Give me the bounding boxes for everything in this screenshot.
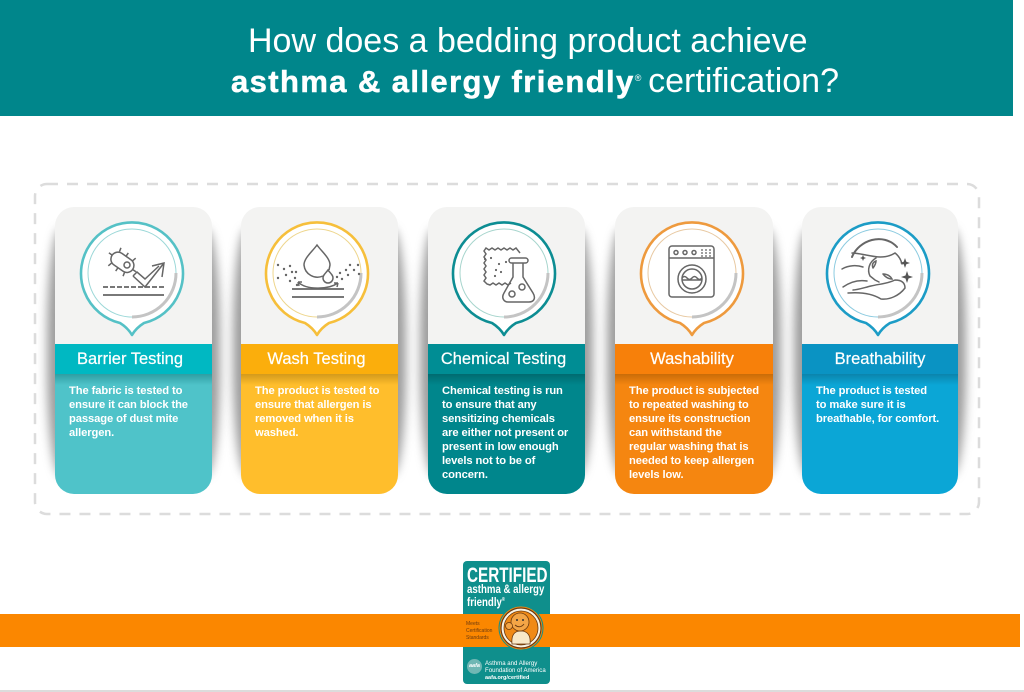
description [255,385,379,439]
badge: meets standards [466,621,492,641]
description: present in low enough [442,441,559,453]
body text panel [802,374,958,494]
badge: aafa logo: aafa [469,663,480,669]
description: levels not to be of [442,455,535,467]
badge: foundation name [485,660,546,674]
panel: barrier testing [40,207,226,494]
description: The product is tested to [255,385,379,397]
panel: chemical testing [414,207,600,494]
heading: wash testing [241,344,398,374]
body text panel [615,374,773,494]
badge: url: aafa.org/certified [485,675,529,681]
badge: aafa logo [467,659,482,674]
description: allergen. [69,427,114,439]
description: are either not present or [442,427,568,439]
description: sensitizing chemicals [442,413,555,425]
heading: barrier testing: Barrier Testing [77,350,183,368]
badge: program name: asthma & allergy [467,584,544,596]
badge: program name [467,584,544,608]
description: ensure its construction [629,413,750,425]
badge: foundation name: Asthma and Allergy [485,660,537,667]
heading: barrier testing [55,344,212,374]
description: to make sure it is [816,399,906,411]
certification badge [463,561,550,684]
faint bottom rule [0,690,1024,692]
description: can withstand the [629,427,722,439]
description [816,385,939,425]
heading: washability [615,344,773,374]
heading: chemical testing: Chemical Testing [441,350,566,368]
heading: washability: Washability [650,350,734,368]
icon: fabric swatch and flask [452,221,556,336]
description: levels low. [629,469,683,481]
description: washed. [255,427,298,439]
icon: washing machine [640,221,744,336]
panel: wash testing [226,207,412,494]
panel: breathability [788,207,972,494]
heading line 2: asthma & allergy friendly® certification? [231,62,839,100]
description: Chemical testing is run [442,385,563,397]
body text panel [55,374,212,494]
icon: water drop on fabric [264,221,370,336]
description: breathable, for comfort. [816,413,939,425]
description: to repeated washing to [629,399,749,411]
badge: teddy bear seal [498,606,544,650]
description: ensure it can block the [69,399,188,411]
description [69,385,188,439]
title banner [0,0,1013,116]
badge: program name: friendly® [467,596,505,608]
heading: breathability: Breathability [835,350,925,368]
description: passage of dust mite [69,413,178,425]
body text panel [428,374,585,494]
heading: breathability [802,344,958,374]
heading line 1: How does a bedding product achieve [248,22,808,60]
description: ensure that allergen is [255,399,371,411]
description: needed to keep allergen [629,455,754,467]
badge: meets standards: Meets [466,621,480,627]
description [442,385,568,481]
description: The product is subjected [629,385,759,397]
icon: sleeping person [826,221,930,336]
badge: meets standards: Standards [466,635,489,641]
badge: certified: CERTIFIED [467,563,548,587]
panel: washability [600,207,788,494]
description: concern. [442,469,488,481]
orange stripe [0,614,1020,647]
heading: wash testing: Wash Testing [267,350,366,368]
description: regular washing that is [629,441,749,453]
description: The product is tested [816,385,927,397]
heading: chemical testing [428,344,585,374]
description: The fabric is tested to [69,385,182,397]
badge: orange panel [463,614,550,647]
description: to ensure that any [442,399,537,411]
body text panel [241,374,398,494]
icon: bacteria blocked by barrier [80,221,184,336]
description [629,385,759,481]
description: removed when it is [255,413,354,425]
badge: meets standards: Certification [466,628,492,634]
badge: foundation name: Foundation of America [485,666,546,674]
